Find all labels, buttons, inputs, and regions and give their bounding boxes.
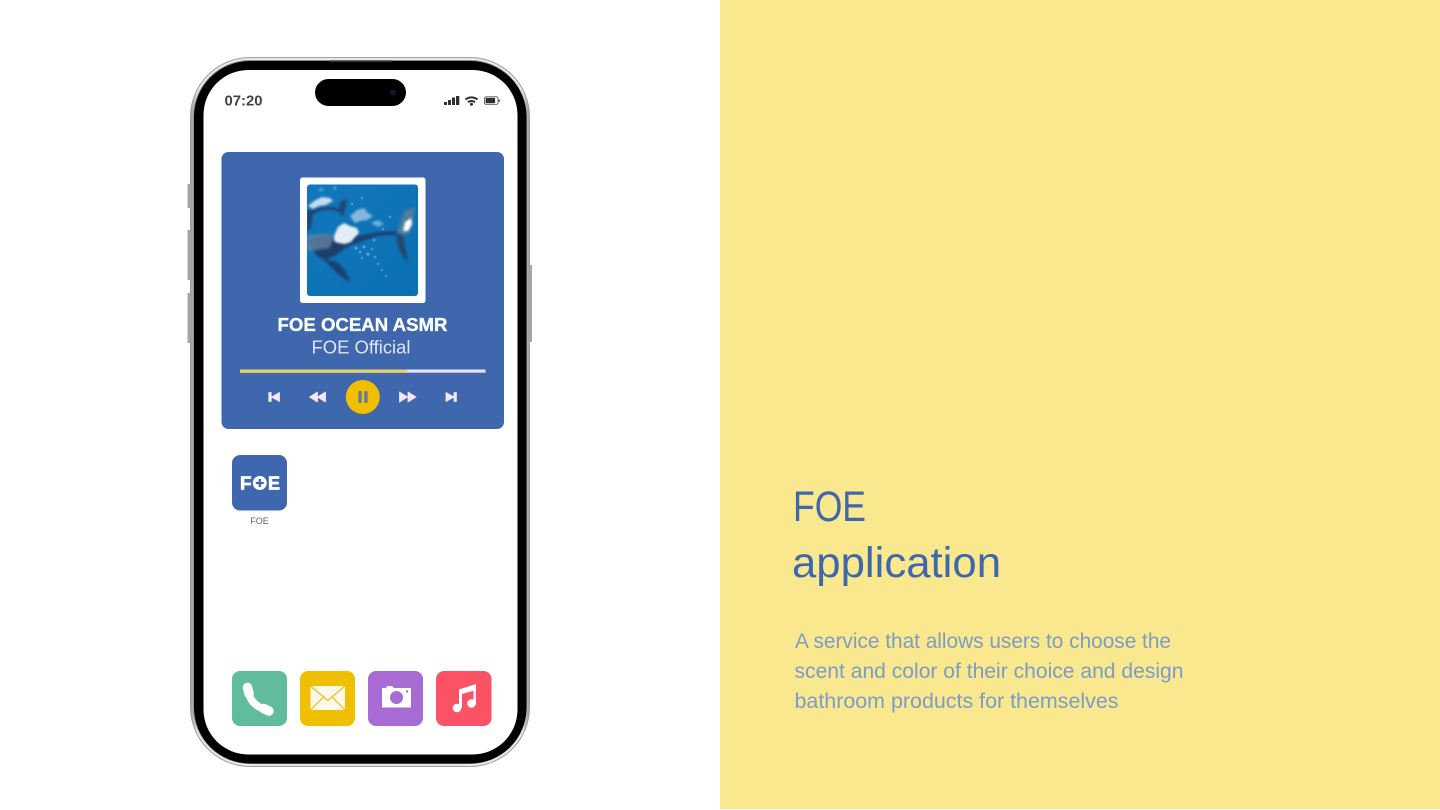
panel: music player widget (222, 152, 504, 429)
icon: next track (446, 392, 456, 402)
phone frame (188, 57, 532, 767)
dynamic island (315, 79, 406, 106)
app icon: phone (232, 671, 287, 726)
track artist: FOE Official (312, 336, 410, 358)
text block: service description (794, 629, 1184, 713)
status bar time: 07:20 (224, 94, 262, 110)
panel: yellow background (720, 0, 1440, 809)
app icon: FOE: E (268, 474, 280, 494)
text block: service description: bathroom products for themselves (794, 689, 1118, 713)
app icon: FOE: F (240, 474, 252, 494)
icon: pause button (346, 380, 380, 414)
app icon: camera (368, 671, 423, 726)
heading: FOE application (792, 483, 1001, 587)
heading: FOE application: application (792, 539, 1001, 587)
app icon: mail (300, 671, 355, 726)
icon: fast forward (400, 392, 416, 402)
text block: service description: scent and color of their choice and design (794, 659, 1184, 683)
text block: service description: A service that allows users to choose the (795, 629, 1171, 653)
phone screen (204, 70, 518, 754)
phone mockup (188, 57, 532, 767)
icon: previous track (269, 392, 280, 402)
status bar icons (444, 96, 500, 106)
heading: FOE application: FOE (793, 483, 866, 531)
player controls (269, 380, 456, 414)
album art (300, 178, 426, 303)
progress bar (240, 370, 486, 373)
track title: FOE OCEAN ASMR (278, 314, 448, 335)
app icon: FOE (232, 455, 287, 526)
icon: rewind (310, 392, 326, 402)
app icon: music (436, 671, 492, 726)
app icon: FOE: FOE (250, 516, 269, 526)
